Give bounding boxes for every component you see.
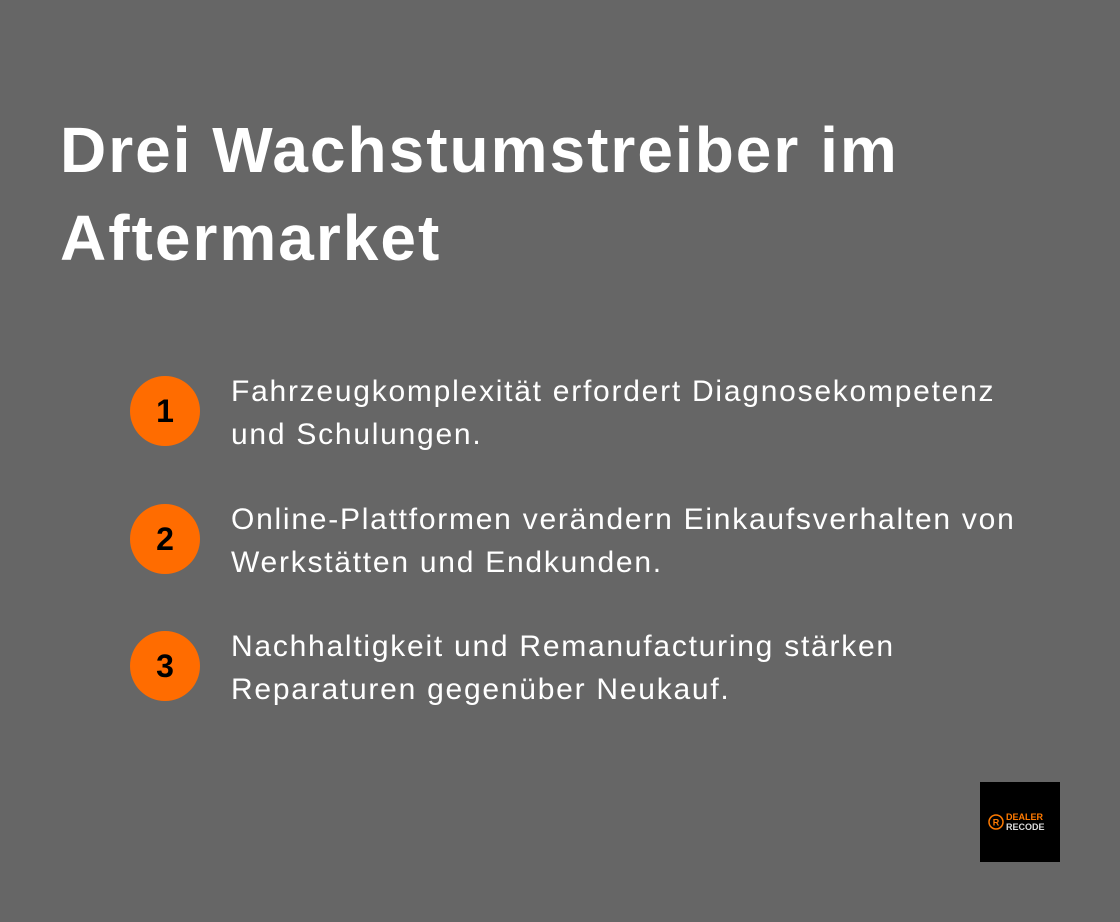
text 2 [231,503,1016,579]
text 1 [231,375,995,451]
item 1 [130,375,995,451]
number badge 3: 3 [156,648,174,684]
number badge 2: 2 [156,521,174,557]
title: Drei Wachstumstreiber im [60,114,899,186]
text 3 [231,630,895,706]
logo: RECODE [1006,822,1045,832]
text 3: Reparaturen gegenüber Neukauf. [231,673,730,706]
text 1: und Schulungen. [231,418,482,451]
text 3: Nachhaltigkeit und Remanufacturing stärken [231,630,895,663]
text 1: Fahrzeugkomplexität erfordert Diagnosekompetenz [231,375,995,408]
title: Aftermarket [60,202,441,274]
text 2: Werkstätten und Endkunden. [231,546,663,579]
number badge 3 [130,631,200,701]
item 2 [130,503,1016,579]
number badge 1 [130,376,200,446]
logo: R [993,818,1000,828]
item 3 [130,630,895,706]
title [60,114,899,274]
number badge 1: 1 [156,393,174,429]
logo: DEALER [1006,812,1044,822]
logo [980,782,1060,862]
number badge 2 [130,504,200,574]
text 2: Online-Plattformen verändern Einkaufsverhalten von [231,503,1016,536]
